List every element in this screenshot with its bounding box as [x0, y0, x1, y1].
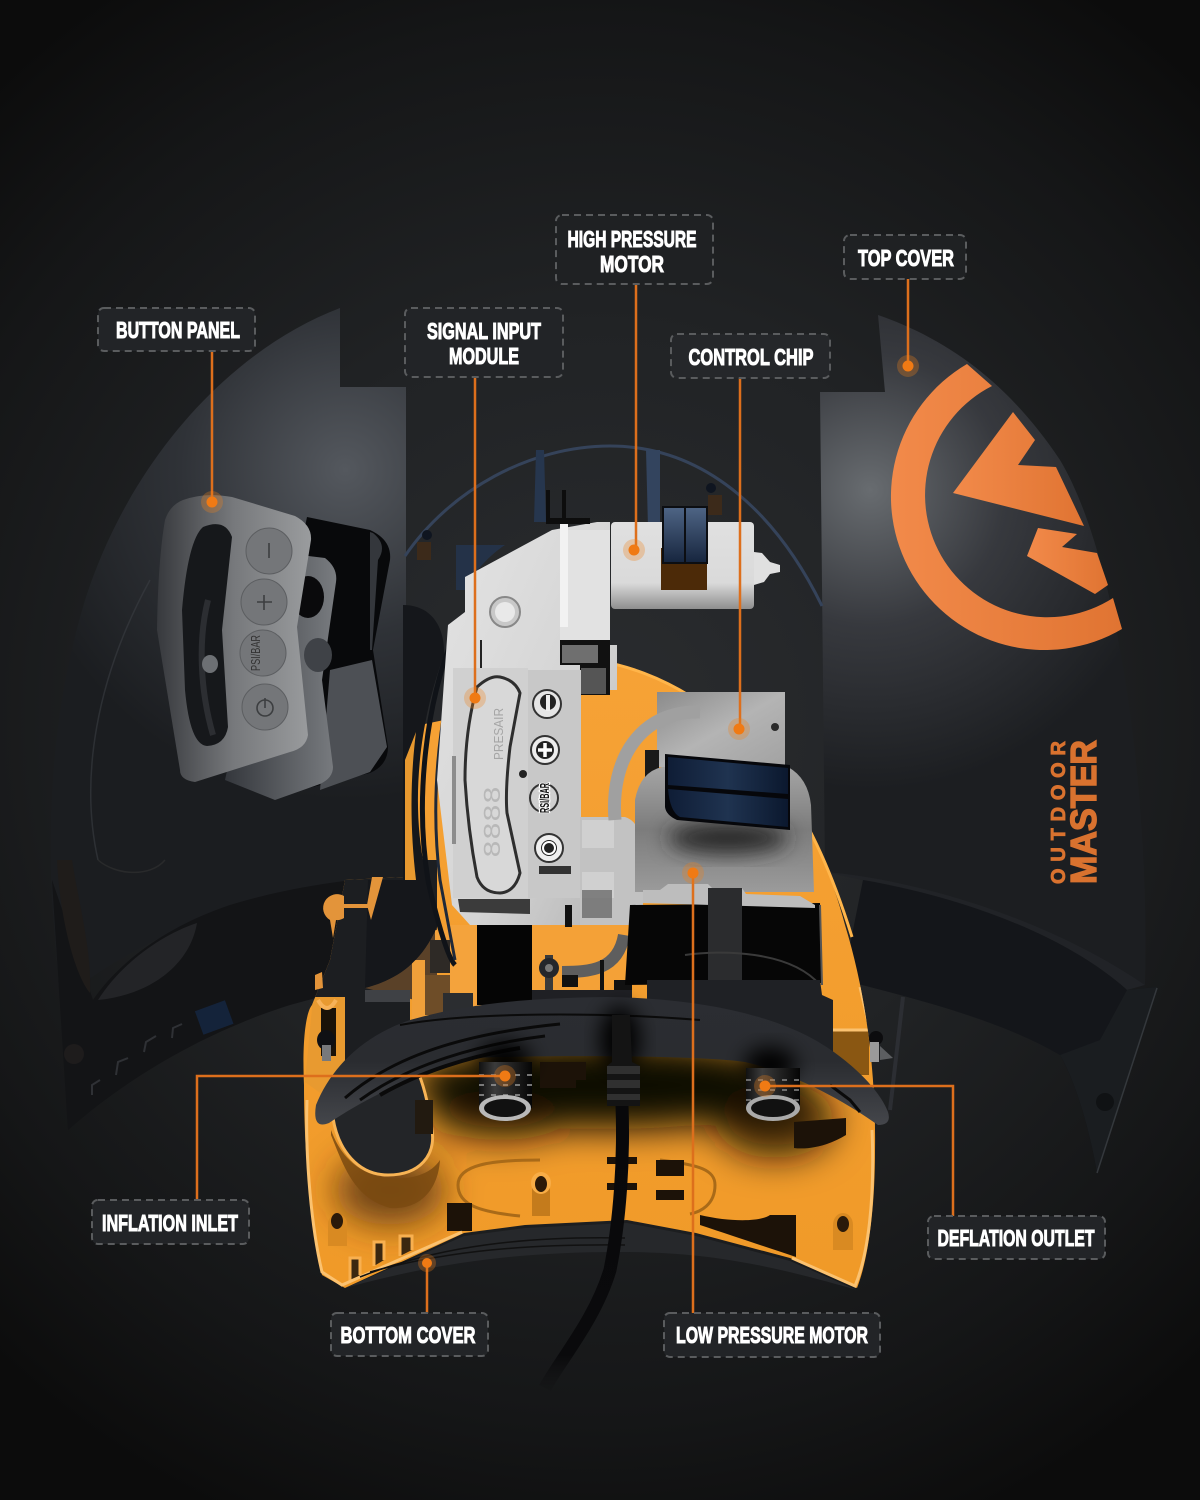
callout: signal input module: MODULE [449, 343, 519, 369]
display pad [465, 677, 520, 893]
interior shadow [335, 1041, 835, 1225]
teeth [350, 1236, 412, 1282]
callout: signal input module [405, 308, 563, 709]
icon: bracket fragments on left cover [315, 877, 383, 990]
panel: low pressure motor [600, 712, 833, 1055]
callout: high pressure motor: MOTOR [600, 251, 664, 277]
panel: orange bottom cover shell [300, 658, 875, 1290]
wires beside the input module [365, 605, 460, 988]
callout: top cover: TOP COVER [858, 245, 954, 271]
panel: button panel plates: PSI/BAR [248, 635, 263, 671]
detail: right cover screw post [869, 1031, 893, 1062]
callout: deflation outlet [754, 1075, 1105, 1259]
callout: high pressure motor [556, 215, 713, 561]
panel: signal input module body: 8888 [481, 786, 508, 858]
panel: black curved bumper [315, 997, 889, 1125]
panel: button panel plates [157, 495, 390, 800]
icon: deflation outlet fitting [746, 1068, 800, 1121]
icon: Outdoor Master logo [891, 364, 1122, 650]
callout: high pressure motor: HIGH PRESSURE [568, 226, 696, 252]
panel: signal input module body [437, 490, 643, 927]
callout: inflation inlet: INFLATION INLET [102, 1210, 238, 1236]
callout: top cover [844, 235, 966, 377]
dark slots [447, 1062, 846, 1257]
callout: button panel: BUTTON PANEL [116, 317, 240, 343]
text: brand name on cover: OUTDOOR [1048, 740, 1070, 884]
callout: deflation outlet: DEFLATION OUTLET [938, 1225, 1094, 1251]
right lower section [833, 1030, 869, 1075]
thin arc wire [405, 446, 822, 606]
text: brand name on cover: MASTER [1063, 740, 1104, 884]
icon: inflation inlet fitting [479, 1062, 532, 1121]
power cable [545, 1015, 640, 1388]
corner posts [328, 1213, 853, 1250]
callout: bottom cover: BOTTOM COVER [340, 1322, 476, 1348]
post [532, 1180, 550, 1216]
panel: right half of top cover [820, 315, 1157, 1173]
left rib column [305, 997, 345, 1100]
module plate [453, 668, 528, 898]
coupling [580, 817, 643, 925]
left dark cover overlap [314, 860, 437, 1060]
module buttons [530, 690, 563, 862]
panel: signal input module body: PRESAIR [491, 708, 506, 760]
underside of the shell [345, 1223, 857, 1290]
callout: low pressure motor: LOW PRESSURE MOTOR [676, 1322, 868, 1348]
callout: low pressure motor [664, 862, 880, 1357]
callout: bottom cover [331, 1254, 488, 1356]
callout: control chip [671, 334, 830, 740]
callout: inflation inlet [92, 1065, 516, 1244]
panel buttons [240, 528, 292, 730]
panel: signal input module body: RSI/BAR [537, 783, 552, 813]
panel: control chip board [645, 692, 785, 790]
callout: button panel [98, 308, 255, 513]
oval groove [458, 1160, 715, 1216]
panel: high pressure motor [611, 506, 780, 609]
ring boss [490, 597, 520, 627]
callout: signal input module: SIGNAL INPUT [427, 318, 541, 344]
left hole [333, 1068, 433, 1175]
panel: left half of top cover [51, 308, 406, 1130]
callout: control chip: CONTROL CHIP [688, 344, 814, 370]
rim lights [307, 1100, 462, 1285]
